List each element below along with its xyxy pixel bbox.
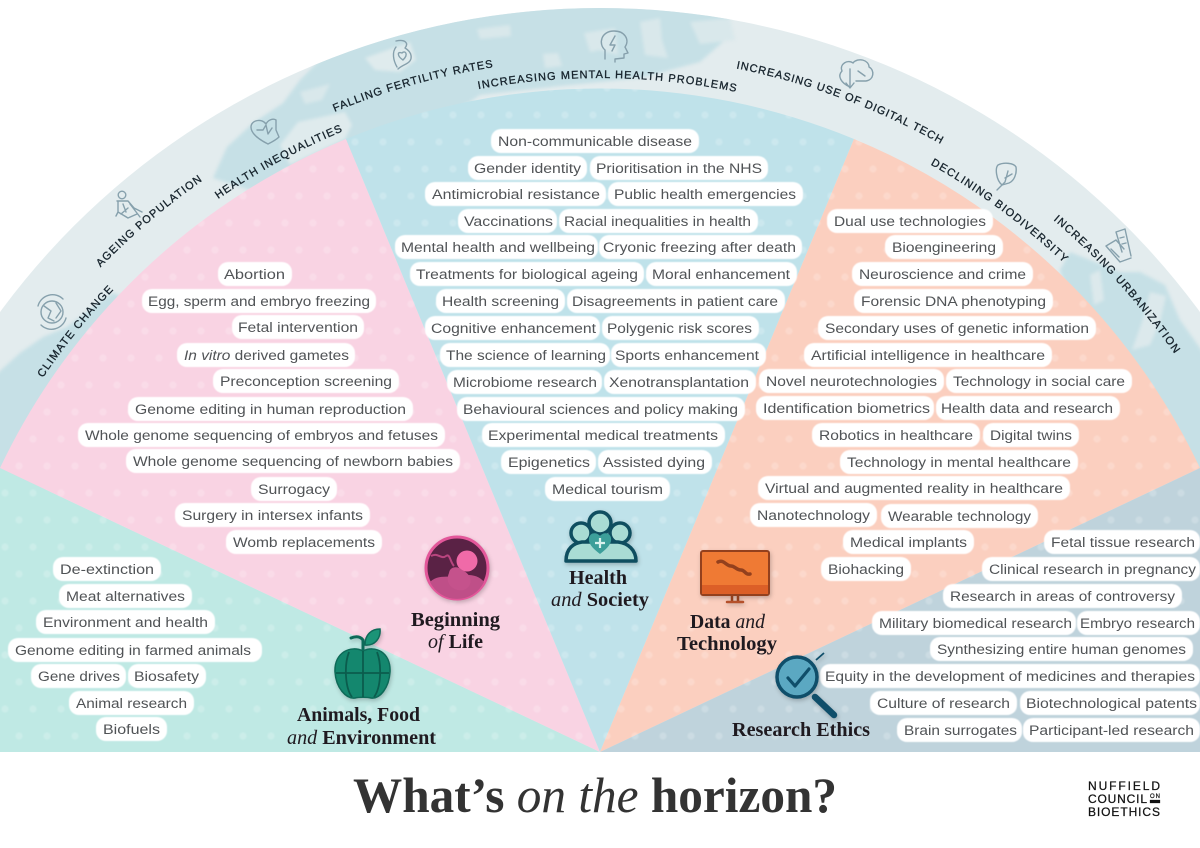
topic: Medical tourism bbox=[545, 477, 670, 501]
topic: Surgery in intersex infants: Surgery in intersex infants bbox=[182, 508, 363, 524]
logo: Nuffield Council on Bioethics: BIOETHICS bbox=[1088, 805, 1160, 819]
topic: Artificial intelligence in healthcare: Artificial intelligence in healthcare bbox=[811, 348, 1045, 364]
topic: Equity in the development of medicines and therapies bbox=[820, 664, 1200, 688]
topic: Assisted dying bbox=[598, 450, 712, 474]
panel: Animals, Food and Environment wedge bbox=[0, 468, 600, 752]
topic: Treatments for biological ageing: Treatments for biological ageing bbox=[416, 267, 638, 283]
topic: Brain surrogates bbox=[897, 718, 1022, 742]
topic: Experimental medical treatments bbox=[482, 423, 725, 447]
heading: Health and Society bbox=[551, 567, 649, 611]
topic: Environment and health: Environment and health bbox=[43, 615, 208, 631]
topic: Biofuels bbox=[96, 717, 167, 741]
curved horizon labels: INCREASING MENTAL HEALTH PROBLEMS bbox=[478, 70, 736, 92]
topic: Participant-led research: Participant-led research bbox=[1029, 723, 1194, 739]
logo: Nuffield Council on Bioethics: NUFFIELD bbox=[1088, 779, 1160, 793]
topic: Non-communicable disease: Non-communicable disease bbox=[498, 134, 692, 150]
logo: Nuffield Council on Bioethics bbox=[1088, 779, 1160, 819]
topic: Whole genome sequencing of newborn babies: Whole genome sequencing of newborn babies bbox=[133, 454, 453, 470]
topic: Fetal intervention bbox=[232, 315, 364, 339]
topic: Egg, sperm and embryo freezing: Egg, sperm and embryo freezing bbox=[148, 294, 370, 310]
heading: Beginning of Life: Beginning bbox=[411, 609, 500, 631]
topic: Secondary uses of genetic information bbox=[818, 316, 1096, 340]
topic: Nanotechnology bbox=[750, 503, 877, 527]
topic: Culture of research: Culture of research bbox=[877, 696, 1010, 712]
icon: health inequalities heart bbox=[251, 119, 279, 144]
topic: In vitro derived gametes: In vitro derived gametes bbox=[184, 348, 349, 364]
topic: Biosafety bbox=[128, 664, 206, 688]
icon: declining biodiversity tree bbox=[996, 163, 1016, 190]
curved horizon labels: CLIMATE CHANGE bbox=[38, 285, 114, 376]
topic: Military biomedical research: Military biomedical research bbox=[879, 616, 1072, 632]
topic: Clinical research in pregnancy: Clinical research in pregnancy bbox=[989, 562, 1197, 578]
topic: Meat alternatives: Meat alternatives bbox=[66, 589, 185, 605]
topic: Womb replacements: Womb replacements bbox=[233, 535, 375, 551]
topic: Technology in social care: Technology in social care bbox=[953, 374, 1125, 390]
topic: Technology in mental healthcare: Technology in mental healthcare bbox=[847, 455, 1071, 471]
panel: Research Ethics wedge bbox=[600, 468, 1200, 752]
topic: Preconception screening: Preconception screening bbox=[220, 374, 392, 390]
topic: Neuroscience and crime bbox=[852, 262, 1033, 286]
topic: Novel neurotechnologies: Novel neurotechnologies bbox=[766, 374, 937, 390]
curved horizon labels: AGEING POPULATION bbox=[97, 174, 202, 268]
topic: Disagreements in patient care: Disagreements in patient care bbox=[572, 294, 778, 310]
heading: Data and Technology bbox=[677, 611, 777, 655]
topic: Behavioural sciences and policy making: Behavioural sciences and policy making bbox=[463, 402, 738, 418]
topic: Non-communicable disease bbox=[491, 129, 699, 153]
topic: Digital twins bbox=[983, 423, 1079, 447]
topics: Animals, Food and Environment bbox=[8, 557, 262, 741]
icon: embryo bbox=[426, 537, 488, 599]
topic: Mental health and wellbeing bbox=[395, 235, 598, 259]
topic: Gene drives: Gene drives bbox=[38, 669, 120, 685]
topic: Cryonic freezing after death: Cryonic freezing after death bbox=[603, 240, 796, 256]
topic: Vaccinations: Vaccinations bbox=[464, 214, 553, 230]
topic: Research in areas of controversy: Research in areas of controversy bbox=[950, 589, 1176, 605]
topic: Identification biometrics: Identification biometrics bbox=[763, 401, 930, 417]
topic: De-extinction: De-extinction bbox=[60, 562, 154, 578]
topic: Public health emergencies: Public health emergencies bbox=[614, 187, 796, 203]
topic: Abortion bbox=[218, 262, 292, 286]
panel: Data and Technology wedge bbox=[600, 139, 1200, 752]
topic: Whole genome sequencing of newborn babies bbox=[126, 449, 460, 473]
curved horizon labels bbox=[38, 60, 1180, 376]
topic: Cognitive enhancement bbox=[425, 316, 600, 340]
topic: Technology in mental healthcare bbox=[840, 450, 1078, 474]
topic: Neuroscience and crime: Neuroscience and crime bbox=[859, 267, 1026, 283]
icon: group of people with heart bbox=[566, 512, 636, 561]
topic: Health data and research: Health data and research bbox=[941, 401, 1113, 417]
topic: Biofuels: Biofuels bbox=[103, 722, 160, 738]
topic: Prioritisation in the NHS: Prioritisation in the NHS bbox=[596, 161, 762, 177]
topic: Sports enhancement bbox=[611, 343, 766, 367]
icon: urbanization buildings bbox=[1106, 229, 1131, 262]
topics: Research Ethics bbox=[820, 530, 1200, 742]
curved horizon labels: DECLINING BIODIVERSITY bbox=[931, 158, 1069, 261]
topic: Egg, sperm and embryo freezing bbox=[142, 289, 376, 313]
topic: Gender identity bbox=[468, 156, 587, 180]
topic: Biohacking: Biohacking bbox=[828, 562, 904, 578]
topic: Participant-led research bbox=[1023, 718, 1200, 742]
heading: Animals, Food and Environment: and Environment bbox=[287, 727, 436, 749]
icon: apple globe bbox=[335, 629, 390, 698]
heading: Animals, Food and Environment bbox=[287, 704, 436, 749]
topic: Clinical research in pregnancy bbox=[982, 557, 1200, 581]
topic: Dual use technologies: Dual use technologies bbox=[834, 214, 986, 230]
topic: Genome editing in human reproduction: Genome editing in human reproduction bbox=[135, 402, 406, 418]
topics: Beginning of Life bbox=[78, 262, 460, 554]
topic: Moral enhancement bbox=[646, 262, 797, 286]
topic: Synthesizing entire human genomes bbox=[930, 637, 1193, 661]
topic: Fetal intervention: Fetal intervention bbox=[238, 320, 358, 336]
topic: Embryo research: Embryo research bbox=[1080, 616, 1195, 632]
topic: Nanotechnology: Nanotechnology bbox=[757, 508, 871, 524]
topic: Secondary uses of genetic information: Secondary uses of genetic information bbox=[825, 321, 1089, 337]
topic: Military biomedical research bbox=[872, 611, 1076, 635]
topic: Treatments for biological ageing bbox=[410, 262, 644, 286]
topic: The science of learning: The science of learning bbox=[446, 348, 606, 364]
topic: Moral enhancement: Moral enhancement bbox=[652, 267, 790, 283]
topic: Artificial intelligence in healthcare bbox=[804, 343, 1052, 367]
topic: Biotechnological patents: Biotechnological patents bbox=[1026, 696, 1197, 712]
topic: Disagreements in patient care bbox=[567, 289, 785, 313]
heading: Data and Technology: Technology bbox=[677, 633, 777, 655]
topic: Medical implants: Medical implants bbox=[850, 535, 967, 551]
icon: digital tech cloud bbox=[840, 60, 873, 88]
topic: Surrogacy: Surrogacy bbox=[258, 482, 331, 498]
topic: Biohacking bbox=[821, 557, 911, 581]
topic: Epigenetics: Epigenetics bbox=[508, 455, 590, 471]
heading: Health and Society: and Society bbox=[551, 589, 649, 611]
topic: Surrogacy bbox=[251, 477, 337, 501]
heading: Animals, Food and Environment: Animals, Food bbox=[297, 704, 420, 726]
logo: Nuffield Council on Bioethics: COUNCIL bbox=[1088, 792, 1147, 806]
topic: Sports enhancement: Sports enhancement bbox=[615, 348, 759, 364]
topic: Whole genome sequencing of embryos and fetuses: Whole genome sequencing of embryos and fetuses bbox=[85, 428, 438, 444]
topic: Virtual and augmented reality in healthcare bbox=[758, 476, 1070, 500]
heading: Beginning of Life: of Life bbox=[428, 631, 483, 653]
topics: Data and Technology bbox=[750, 209, 1132, 581]
topic: Abortion: Abortion bbox=[224, 267, 285, 283]
topic: Cognitive enhancement: Cognitive enhancement bbox=[431, 321, 596, 337]
topic: Gene drives bbox=[31, 664, 126, 688]
topic: Bioengineering: Bioengineering bbox=[892, 240, 996, 256]
topic: Brain surrogates: Brain surrogates bbox=[904, 723, 1017, 739]
icon: climate change globe bbox=[38, 295, 66, 329]
topic: Assisted dying: Assisted dying bbox=[603, 455, 705, 471]
curved horizon labels: INCREASING USE OF DIGITAL TECH bbox=[736, 61, 944, 144]
topic: Xenotransplantation: Xenotransplantation bbox=[609, 375, 749, 391]
logo: Nuffield Council on Bioethics: ON bbox=[1150, 794, 1160, 800]
topic: Embryo research bbox=[1077, 611, 1200, 635]
topic: Identification biometrics bbox=[756, 396, 934, 420]
topic: Dual use technologies bbox=[827, 209, 993, 233]
topic: Antimicrobial resistance: Antimicrobial resistance bbox=[432, 187, 600, 203]
topic: The science of learning bbox=[440, 343, 610, 367]
topic: Epigenetics bbox=[501, 450, 596, 474]
topic: Fetal tissue research: Fetal tissue research bbox=[1051, 535, 1195, 551]
topic: Wearable technology: Wearable technology bbox=[888, 509, 1032, 525]
heading: Health and Society: Health bbox=[569, 567, 627, 589]
icon: magnifying glass with tick bbox=[777, 653, 834, 715]
topic: Public health emergencies bbox=[608, 182, 803, 206]
topic: Research in areas of controversy bbox=[943, 584, 1182, 608]
topic: Health data and research bbox=[936, 396, 1120, 420]
topic: Whole genome sequencing of embryos and fetuses bbox=[78, 423, 445, 447]
curved horizon labels: FALLING FERTILITY RATES bbox=[332, 60, 492, 112]
topic: Biotechnological patents bbox=[1020, 691, 1200, 715]
curved horizon labels: INCREASING URBANIZATION bbox=[1054, 214, 1180, 354]
topic: Racial inequalities in health bbox=[559, 209, 758, 233]
topic: Equity in the development of medicines and therapies: Equity in the development of medicines and therapies bbox=[825, 669, 1195, 685]
topic: Microbiome research bbox=[447, 370, 602, 394]
topic: Virtual and augmented reality in healthcare: Virtual and augmented reality in healthcare bbox=[765, 481, 1063, 497]
topic: Synthesizing entire human genomes: Synthesizing entire human genomes bbox=[937, 642, 1186, 658]
topic: Vaccinations bbox=[458, 209, 557, 233]
topic: Biosafety: Biosafety bbox=[134, 669, 200, 685]
topic: Animal research: Animal research bbox=[76, 696, 187, 712]
topic: Health screening bbox=[436, 289, 565, 313]
horizon band with world map bbox=[0, 8, 1200, 492]
panel: Health and Society wedge bbox=[346, 88, 854, 752]
topic: In vitro derived gametes bbox=[177, 343, 355, 367]
topic: De-extinction bbox=[53, 557, 161, 581]
topic: Experimental medical treatments: Experimental medical treatments bbox=[488, 428, 718, 444]
topic: Antimicrobial resistance bbox=[425, 182, 606, 206]
topic: Meat alternatives bbox=[59, 584, 192, 608]
topic: Genome editing in farmed animals: Genome editing in farmed animals bbox=[15, 643, 251, 659]
curved horizon labels: HEALTH INEQUALITIES bbox=[214, 125, 342, 199]
topic: Forensic DNA phenotyping bbox=[854, 289, 1053, 313]
topic: Genome editing in human reproduction bbox=[128, 397, 413, 421]
icon: mental health head bbox=[601, 31, 628, 62]
panel: Beginning of Life wedge bbox=[0, 139, 600, 752]
topic: Preconception screening bbox=[213, 369, 399, 393]
topic: Fetal tissue research bbox=[1044, 530, 1200, 554]
topic: Medical tourism: Medical tourism bbox=[552, 482, 663, 498]
topic: Gender identity: Gender identity bbox=[474, 161, 582, 177]
topic: Surgery in intersex infants bbox=[175, 503, 370, 527]
topic: Animal research bbox=[69, 691, 194, 715]
topic: Racial inequalities in health: Racial inequalities in health bbox=[564, 214, 751, 230]
heading: Research Ethics: Research Ethics bbox=[732, 719, 870, 741]
icon: monitor bbox=[701, 551, 769, 602]
topic: Prioritisation in the NHS bbox=[590, 156, 768, 180]
icon: ageing population bbox=[116, 191, 142, 218]
topic: Behavioural sciences and policy making bbox=[457, 397, 745, 421]
topic: Technology in social care bbox=[946, 369, 1132, 393]
topics: Health and Society bbox=[395, 129, 803, 501]
topic: Robotics in healthcare: Robotics in healthcare bbox=[819, 428, 973, 444]
topic: Polygenic risk scores bbox=[602, 316, 759, 340]
topic: Culture of research bbox=[870, 691, 1017, 715]
topic: Microbiome research: Microbiome research bbox=[453, 375, 597, 391]
topic: Health screening: Health screening bbox=[442, 294, 559, 310]
topic: Womb replacements bbox=[226, 530, 382, 554]
topic: Polygenic risk scores: Polygenic risk scores bbox=[607, 321, 752, 337]
topic: Environment and health bbox=[36, 610, 215, 634]
topic: Cryonic freezing after death bbox=[599, 235, 802, 259]
topic: Genome editing in farmed animals bbox=[8, 638, 262, 662]
heading: Data and Technology: Data and bbox=[690, 611, 766, 633]
topic: Digital twins: Digital twins bbox=[990, 428, 1072, 444]
topic: Medical implants bbox=[843, 530, 974, 554]
heading: Beginning of Life bbox=[411, 609, 500, 653]
title: What’s on the horizon? bbox=[353, 767, 837, 823]
topic: Xenotransplantation bbox=[604, 370, 756, 394]
topic: Bioengineering bbox=[885, 235, 1003, 259]
topic: Novel neurotechnologies bbox=[759, 369, 944, 393]
topic: Wearable technology bbox=[881, 504, 1038, 528]
icon: falling fertility rates bbox=[393, 40, 411, 69]
topic: Mental health and wellbeing: Mental health and wellbeing bbox=[401, 240, 595, 256]
topic: Forensic DNA phenotyping: Forensic DNA phenotyping bbox=[861, 294, 1046, 310]
topic: Robotics in healthcare bbox=[812, 423, 980, 447]
